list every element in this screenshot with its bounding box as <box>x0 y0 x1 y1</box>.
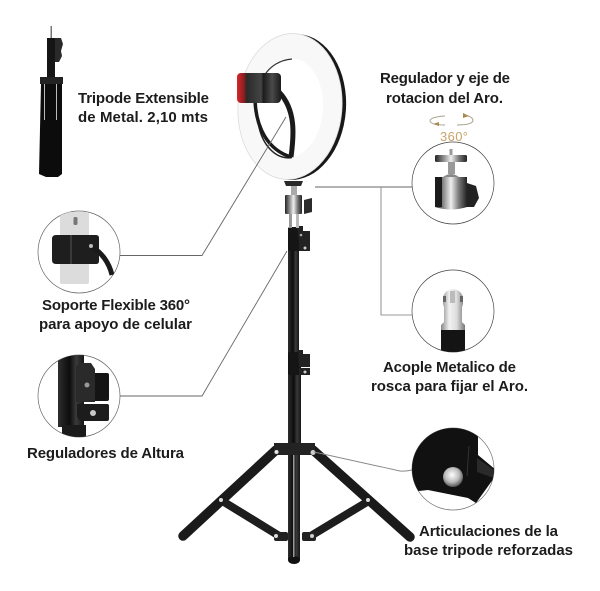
label: phone holder: para apoyo de celular <box>39 316 192 333</box>
center column <box>274 228 316 564</box>
ball head mount <box>284 181 312 228</box>
heading: tripod: Tripode Extensible <box>78 90 209 107</box>
heading: tripod: de Metal. 2,10 mts <box>78 109 208 126</box>
label: base joints: Articulaciones de la <box>419 523 559 540</box>
tripod legs <box>183 450 410 541</box>
heading: ring axis regulator: Regulador y eje de <box>380 70 510 87</box>
icon: 360 rotation <box>430 113 473 144</box>
detail circle: base joint <box>408 425 496 510</box>
label: height regulators: Reguladores de Altura <box>27 445 185 462</box>
icon: 360 rotation: 360° <box>440 129 468 144</box>
detail circle: height clamp <box>38 355 120 440</box>
heading: ring axis regulator: rotacion del Aro. <box>386 90 503 107</box>
heading: tripod <box>78 90 209 126</box>
label: phone holder: Soporte Flexible 360° <box>42 297 190 314</box>
label: phone holder <box>39 297 192 333</box>
phone holder <box>237 73 281 103</box>
detail circle: ball head <box>412 142 494 224</box>
heading: ring axis regulator <box>380 70 510 107</box>
label: base joints <box>404 523 573 559</box>
tripod stand <box>183 226 410 564</box>
label: metal coupler: rosca para fijar el Aro. <box>371 378 528 395</box>
ring light <box>233 30 351 183</box>
height clamps <box>288 226 310 375</box>
connector lines <box>120 117 412 471</box>
label: metal coupler: Acople Metalico de <box>383 359 516 376</box>
detail circle: metal coupler <box>412 270 494 355</box>
label: metal coupler <box>371 359 528 395</box>
icon: folded tripod <box>39 26 63 177</box>
detail circle: phone holder <box>38 211 120 293</box>
label: base joints: base tripode reforzadas <box>404 542 573 559</box>
flexible arm <box>255 100 291 157</box>
